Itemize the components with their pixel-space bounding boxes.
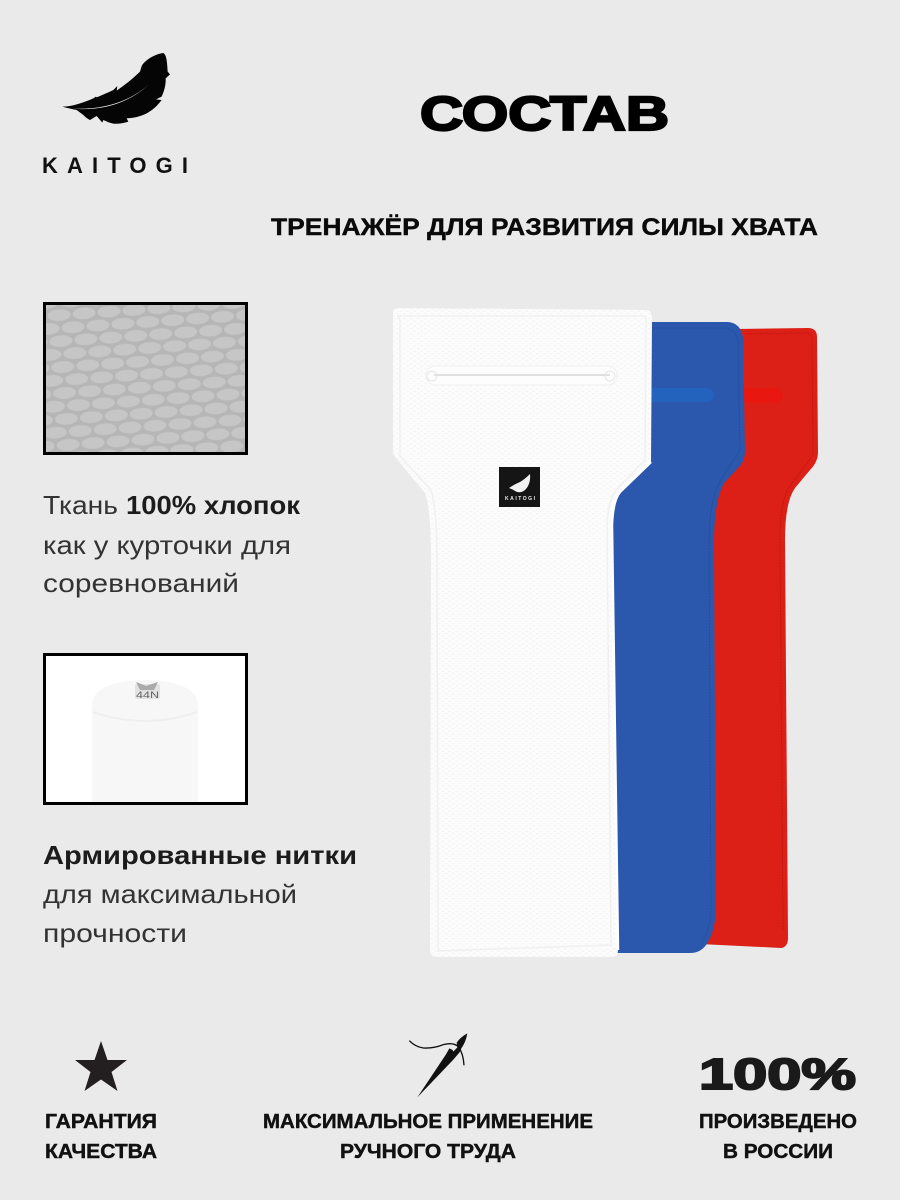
red pocket — [735, 388, 783, 403]
text: thread description: Армированные нитки — [43, 840, 357, 870]
brand label: KAITOGI — [505, 496, 536, 502]
text: fabric description: соревнований — [43, 568, 239, 598]
icon: star — [75, 1041, 127, 1091]
text: fabric description: 100% хлопок — [126, 490, 301, 520]
feature: quality guarantee: КАЧЕСТВА — [45, 1141, 157, 1163]
feature: quality guarantee: ГАРАНТИЯ — [45, 1111, 157, 1133]
text: fabric description: Ткань — [43, 490, 118, 520]
feature: made in Russia — [699, 1050, 857, 1163]
text: thread description: прочности — [43, 918, 187, 948]
feature: hand labor: РУЧНОГО ТРУДА — [340, 1141, 516, 1163]
blue pocket — [640, 388, 714, 402]
icon: needle and thread — [409, 1033, 467, 1097]
brand label — [499, 467, 540, 507]
spool body — [92, 680, 198, 802]
blue trainer — [590, 322, 745, 953]
white pocket — [426, 366, 617, 385]
product photo: three grip trainers — [393, 308, 818, 957]
feature: hand labor: МАКСИМАЛЬНОЕ ПРИМЕНЕНИЕ — [263, 1111, 593, 1133]
title: СОСТАВ — [420, 88, 669, 141]
feature: made in Russia: В РОССИИ — [723, 1141, 833, 1163]
wordmark: KAITOGI — [42, 153, 188, 178]
feature: quality guarantee — [45, 1041, 157, 1163]
feature: made in Russia: ПРОИЗВЕДЕНО — [699, 1111, 857, 1133]
big number: 100% — [699, 1050, 856, 1099]
text: thread description: для максимальной — [43, 879, 297, 909]
panel: thread spool photo — [44, 654, 246, 804]
feature: hand labor — [263, 1033, 593, 1163]
subtitle: ТРЕНАЖЁР ДЛЯ РАЗВИТИЯ СИЛЫ ХВАТА — [271, 214, 818, 241]
icon: feather — [62, 53, 170, 124]
white trainer — [393, 308, 652, 957]
text: thread description — [43, 840, 357, 948]
spool hub — [135, 684, 160, 699]
panel: fabric swatch photo — [44, 304, 246, 454]
red trainer — [695, 328, 818, 948]
logo: Kaitogi feather and wordmark — [42, 53, 188, 178]
panel: thread spool photo: 44N — [136, 690, 159, 700]
text: fabric description — [43, 490, 301, 598]
text: fabric description: как у курточки для — [43, 530, 291, 560]
